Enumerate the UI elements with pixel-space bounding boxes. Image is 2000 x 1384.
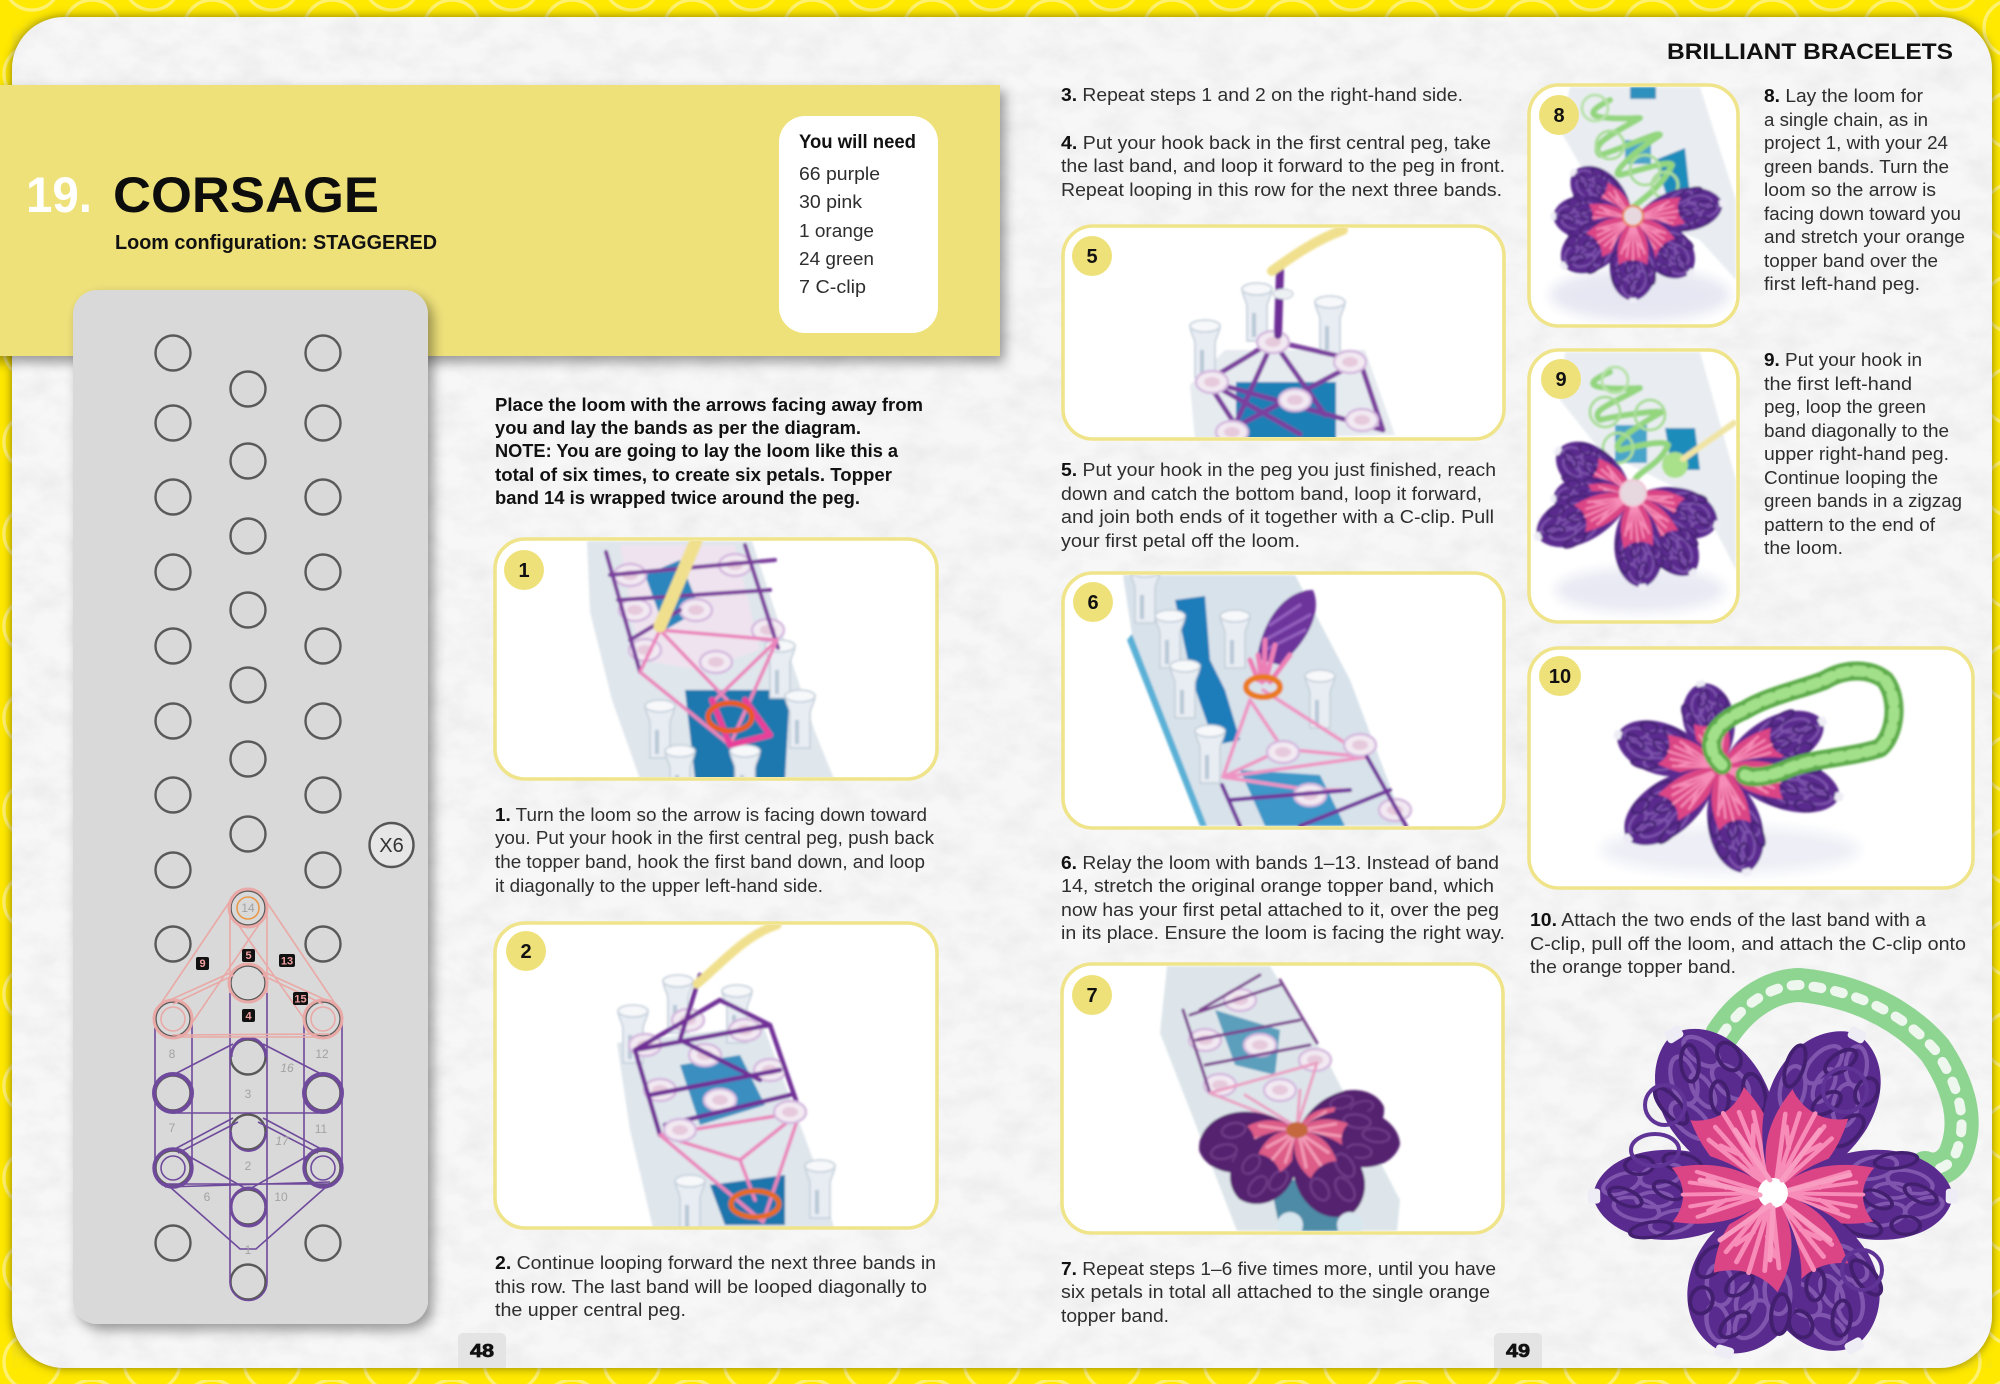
step 8 text: topper band over the [1764, 251, 1938, 271]
band numbers: 10 [274, 1190, 288, 1204]
step 7 photo [1062, 964, 1503, 1238]
step 3 text: 3. Repeat steps 1 and 2 on the right-hand side. [1061, 85, 1463, 105]
step 9 photo [1525, 350, 1738, 622]
band numbers: 5 [245, 950, 252, 962]
step badge 8: 8 [1553, 105, 1565, 127]
band numbers: 16 [280, 1061, 294, 1075]
step 8 text: loom so the arrow is [1764, 180, 1936, 200]
step 7 text: six petals in total all attached to the single orange [1061, 1282, 1490, 1302]
step 2 text [495, 1253, 936, 1320]
band numbers: 11 [315, 1122, 328, 1136]
you will need box: You will need [799, 132, 916, 153]
step 10 photo [1529, 648, 1973, 888]
step 5 text [1061, 460, 1496, 551]
band numbers [169, 901, 329, 1257]
page number 48 [458, 1333, 506, 1368]
band numbers: 9 [199, 958, 206, 970]
step 6 text: 6. Relay the loom with bands 1–13. Instead of band [1061, 853, 1499, 873]
step badge 5: 5 [1086, 246, 1098, 268]
step 9 text: green bands in a zigzag [1764, 491, 1962, 511]
band numbers: 3 [245, 1087, 252, 1101]
repeat marker: X6 [379, 835, 404, 857]
you will need box: 66 purple [799, 164, 880, 184]
running header: BRILLIANT BRACELETS [1667, 39, 1953, 64]
band numbers: 7 [169, 1121, 176, 1135]
band numbers: 13 [281, 956, 293, 968]
step 2 text: 2. Continue looping forward the next three bands in [495, 1253, 936, 1273]
step 1 text: 1. Turn the loom so the arrow is facing down toward [495, 805, 927, 825]
band numbers: 2 [245, 1159, 252, 1173]
step badge 2: 2 [520, 941, 532, 963]
step 4 text [1061, 133, 1505, 200]
step 8 photo [1529, 85, 1738, 326]
title banner [0, 85, 1000, 356]
step 2 text: this row. The last band will be looped diagonally to [495, 1277, 927, 1297]
you will need box: 1 orange [799, 221, 874, 241]
step 7 text: topper band. [1061, 1306, 1169, 1326]
band numbers: 17 [275, 1134, 290, 1148]
step badge 10: 10 [1549, 666, 1571, 688]
step 4 text: the last band, and loop it forward to the peg in front. [1061, 156, 1505, 176]
step 1 photo [495, 539, 937, 803]
page number 49: 49 [1506, 1341, 1530, 1361]
step 8 text: project 1, with your 24 [1764, 133, 1948, 153]
step badge 2 [506, 931, 546, 971]
band numbers: 15 [294, 994, 307, 1006]
step 9 text: 9. Put your hook in [1764, 350, 1922, 370]
step 4 text: Repeat looping in this row for the next three bands. [1061, 180, 1502, 200]
step badge 8 [1539, 95, 1579, 135]
step 8 text [1764, 86, 1965, 294]
band numbers: 6 [204, 1190, 211, 1204]
pink bands [154, 889, 342, 1038]
step badge 1 [504, 550, 544, 590]
repeat marker [370, 823, 414, 867]
step 9 text [1764, 350, 1962, 558]
step 6 photo [1063, 565, 1504, 828]
intro text: Place the loom with the arrows facing away from [495, 395, 923, 415]
you will need box [779, 116, 938, 333]
step 10 text: the orange topper band. [1530, 957, 1736, 977]
step 8 text: facing down toward you [1764, 204, 1961, 224]
step 5 photo [1063, 226, 1504, 443]
step badge 6: 6 [1087, 592, 1099, 614]
band numbers: 4 [245, 1010, 252, 1022]
purple bands [154, 993, 342, 1301]
step badge 1: 1 [518, 560, 530, 582]
step 9 text: the loom. [1764, 538, 1843, 558]
finished corsage photo [1587, 985, 1962, 1378]
step 1 text: it diagonally to the upper left-hand side. [495, 876, 823, 896]
step 2 photo [495, 923, 937, 1233]
step 10 text: C-clip, pull off the loom, and attach the C-clip onto [1530, 934, 1966, 954]
step 5 text: 5. Put your hook in the peg you just finished, reach [1061, 460, 1496, 480]
step 7 text: 7. Repeat steps 1–6 five times more, until you have [1061, 1259, 1496, 1279]
step 1 text: the topper band, hook the first band down, and loop [495, 852, 925, 872]
page number 48: 48 [470, 1341, 494, 1361]
step 6 text: 14, stretch the original orange topper band, which [1061, 876, 1494, 896]
step 6 text [1061, 853, 1505, 943]
you will need box: 24 green [799, 249, 874, 269]
intro text: you and lay the bands as per the diagram. [495, 418, 861, 438]
step badge 7 [1072, 975, 1112, 1015]
band numbers: 8 [169, 1047, 176, 1061]
loom pegs [156, 336, 340, 1300]
step 5 text: your first petal off the loom. [1061, 531, 1300, 551]
step 10 text: 10. Attach the two ends of the last band with a [1530, 910, 1927, 930]
step 1 text [495, 805, 935, 896]
step badge 7: 7 [1086, 985, 1098, 1007]
step 5 text: down and catch the bottom band, loop it forward, [1061, 484, 1482, 504]
you will need box: 7 C-clip [799, 277, 866, 297]
step 6 text: in its place. Ensure the loom is facing the right way. [1061, 923, 1505, 943]
step 10 text [1530, 910, 1966, 977]
intro text: NOTE: You are going to lay the loom like this a [495, 441, 899, 461]
green chain [1722, 985, 1962, 1169]
step 4 text: 4. Put your hook back in the first central peg, take [1061, 133, 1491, 153]
step 9 text: band diagonally to the [1764, 421, 1949, 441]
intro text: band 14 is wrapped twice around the peg. [495, 488, 860, 508]
intro text: total of six times, to create six petals. Topper [495, 465, 892, 485]
step 7 text [1061, 1259, 1496, 1326]
step badge 9: 9 [1555, 369, 1567, 391]
step 9 text: Continue looping the [1764, 468, 1938, 488]
step 2 text: the upper central peg. [495, 1300, 686, 1320]
band numbers: 12 [315, 1047, 329, 1061]
loom configuration: Loom configuration: STAGGERED [115, 232, 437, 254]
page number 49 [1494, 1333, 1542, 1368]
project number: 19. [26, 167, 92, 223]
band numbers: 1 [245, 1243, 252, 1257]
intro text [495, 395, 923, 508]
band numbers: 14 [241, 901, 255, 915]
step 8 text: green bands. Turn the [1764, 157, 1949, 177]
step badge 10 [1539, 656, 1581, 696]
project title: CORSAGE [113, 167, 379, 223]
step 9 text: pattern to the end of [1764, 515, 1936, 535]
step 5 text: and join both ends of it together with a C-clip. Pull [1061, 507, 1494, 527]
step 8 text: a single chain, as in [1764, 110, 1928, 130]
step badge 9 [1541, 359, 1581, 399]
step 9 text: upper right-hand peg. [1764, 444, 1949, 464]
step badge 6 [1073, 582, 1113, 622]
step 8 text: first left-hand peg. [1764, 274, 1920, 294]
panel: loom diagram [73, 290, 428, 1324]
step badge 5 [1072, 236, 1112, 276]
step 9 text: peg, loop the green [1764, 397, 1926, 417]
step 9 text: the first left-hand [1764, 374, 1912, 394]
you will need box: 30 pink [799, 192, 863, 212]
step 6 text: now has your first petal attached to it, over the peg [1061, 900, 1499, 920]
step 1 text: you. Put your hook in the first central peg, push back [495, 828, 935, 848]
step 8 text: 8. Lay the loom for [1764, 86, 1923, 106]
step 8 text: and stretch your orange [1764, 227, 1965, 247]
